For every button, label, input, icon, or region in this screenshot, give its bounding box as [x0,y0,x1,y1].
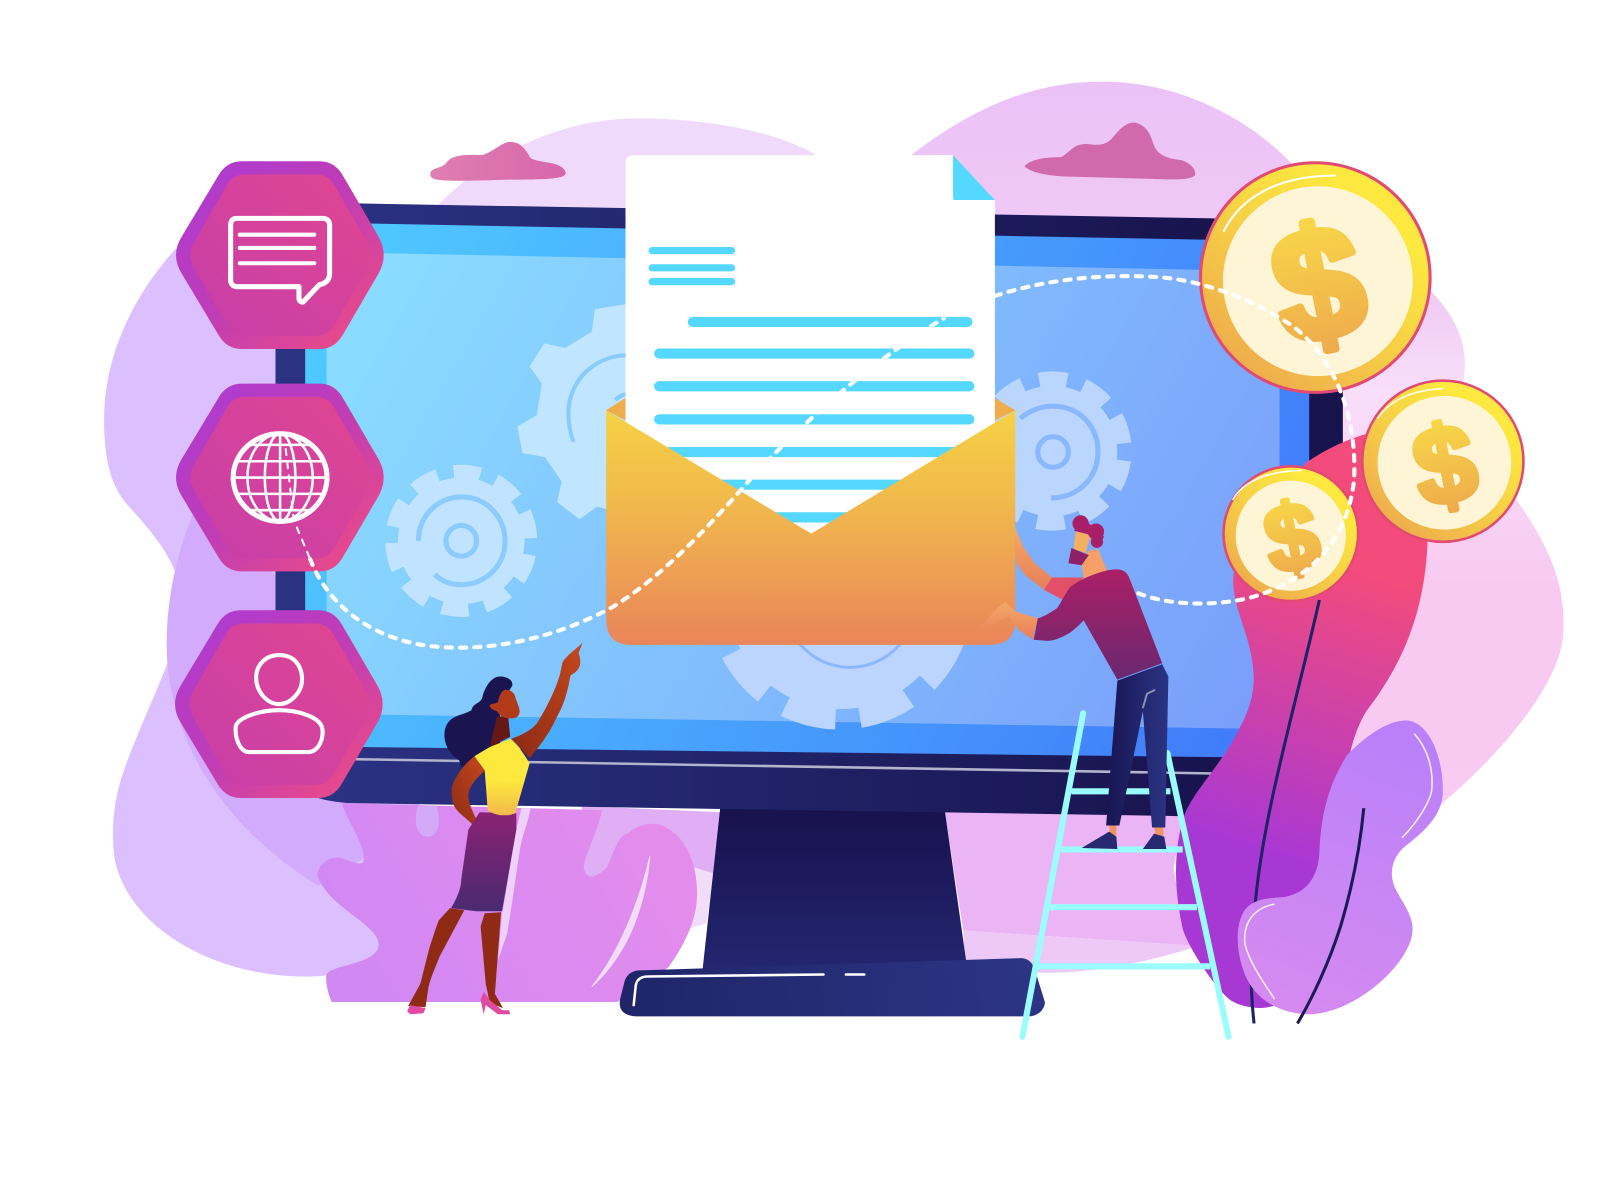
background: lilac ground left of stand [582,806,721,923]
dashed route line [286,276,1354,648]
ladder [1022,713,1229,1037]
man raised arm [1014,529,1052,590]
envelope front [606,410,1015,645]
hexagon connector bars [276,342,305,622]
man sleeve [1044,578,1084,600]
monitor stand [702,806,967,974]
man forehead [1073,532,1091,553]
gear: large centre left [517,304,638,519]
cloud: right [1024,122,1195,179]
plant: violet front leaf [1238,720,1443,1023]
woman raised arm [511,643,583,758]
icon: person [236,655,323,752]
woman neck [490,716,510,747]
man torso [1034,569,1162,680]
leaf stem [1297,808,1364,1023]
plant: large violet leaf left [317,803,697,1002]
coin: large [1201,163,1430,392]
base highlight [634,974,864,1005]
background blob: pale lilac top [439,118,918,306]
background blob: darker lavender [167,490,365,886]
document [626,155,995,571]
background blob: lavender left [104,214,429,977]
person: man on ladder [979,515,1168,849]
woman shoes [407,992,510,1014]
monitor [276,203,1343,1016]
hexagon: chat [176,161,384,349]
woman bent arm [452,756,485,832]
monitor base [620,958,1045,1016]
background: pale ground sliver [682,867,714,931]
chin highlight [354,759,1214,773]
icon: globe [233,434,327,521]
coin: large: $ [1258,189,1378,380]
man beard [1068,548,1089,565]
stem highlight [498,808,531,960]
coin: small [1223,466,1358,601]
person: woman pointing [407,643,583,1014]
man pants seam [1143,690,1155,708]
document sheet [626,155,995,571]
man neck [1082,549,1107,579]
envelope back flap [606,398,1015,420]
monitor screen [327,252,1280,729]
plant: dark stem [1251,600,1319,1023]
man lower hand [979,602,1038,640]
woman legs [408,908,503,1008]
woman hair [444,677,512,767]
icon: speech bubble [231,218,330,302]
document fold [953,155,995,200]
cloud: left [430,142,566,181]
plant: pink tall leaf [1176,433,1428,1008]
gear: bottom centre [687,444,993,750]
coin: right: $ [1404,400,1486,531]
coin: small: $ [1256,481,1328,595]
leaf highlight [592,856,650,987]
man pants [1106,664,1168,828]
hexagon: person [175,610,383,798]
background: pale ground band [963,931,1198,973]
man hair [1072,515,1104,548]
woman face [490,690,520,718]
woman skirt [451,812,516,911]
background blob: pink right [911,82,1564,816]
monitor screen rim [305,223,1309,757]
coin: right [1362,381,1523,542]
man ankles [1109,826,1163,841]
document text lines [652,251,969,517]
leaf highlights [1245,734,1432,999]
woman top [474,739,530,815]
man shoes [1082,832,1166,849]
background: lilac ground right of stand [945,812,1214,946]
leaf droplet [416,806,439,837]
gear: small left [380,460,542,622]
gear: right [973,371,1132,531]
hexagon: globe [176,384,384,571]
envelope [606,398,1015,645]
monitor frame [276,203,1343,816]
